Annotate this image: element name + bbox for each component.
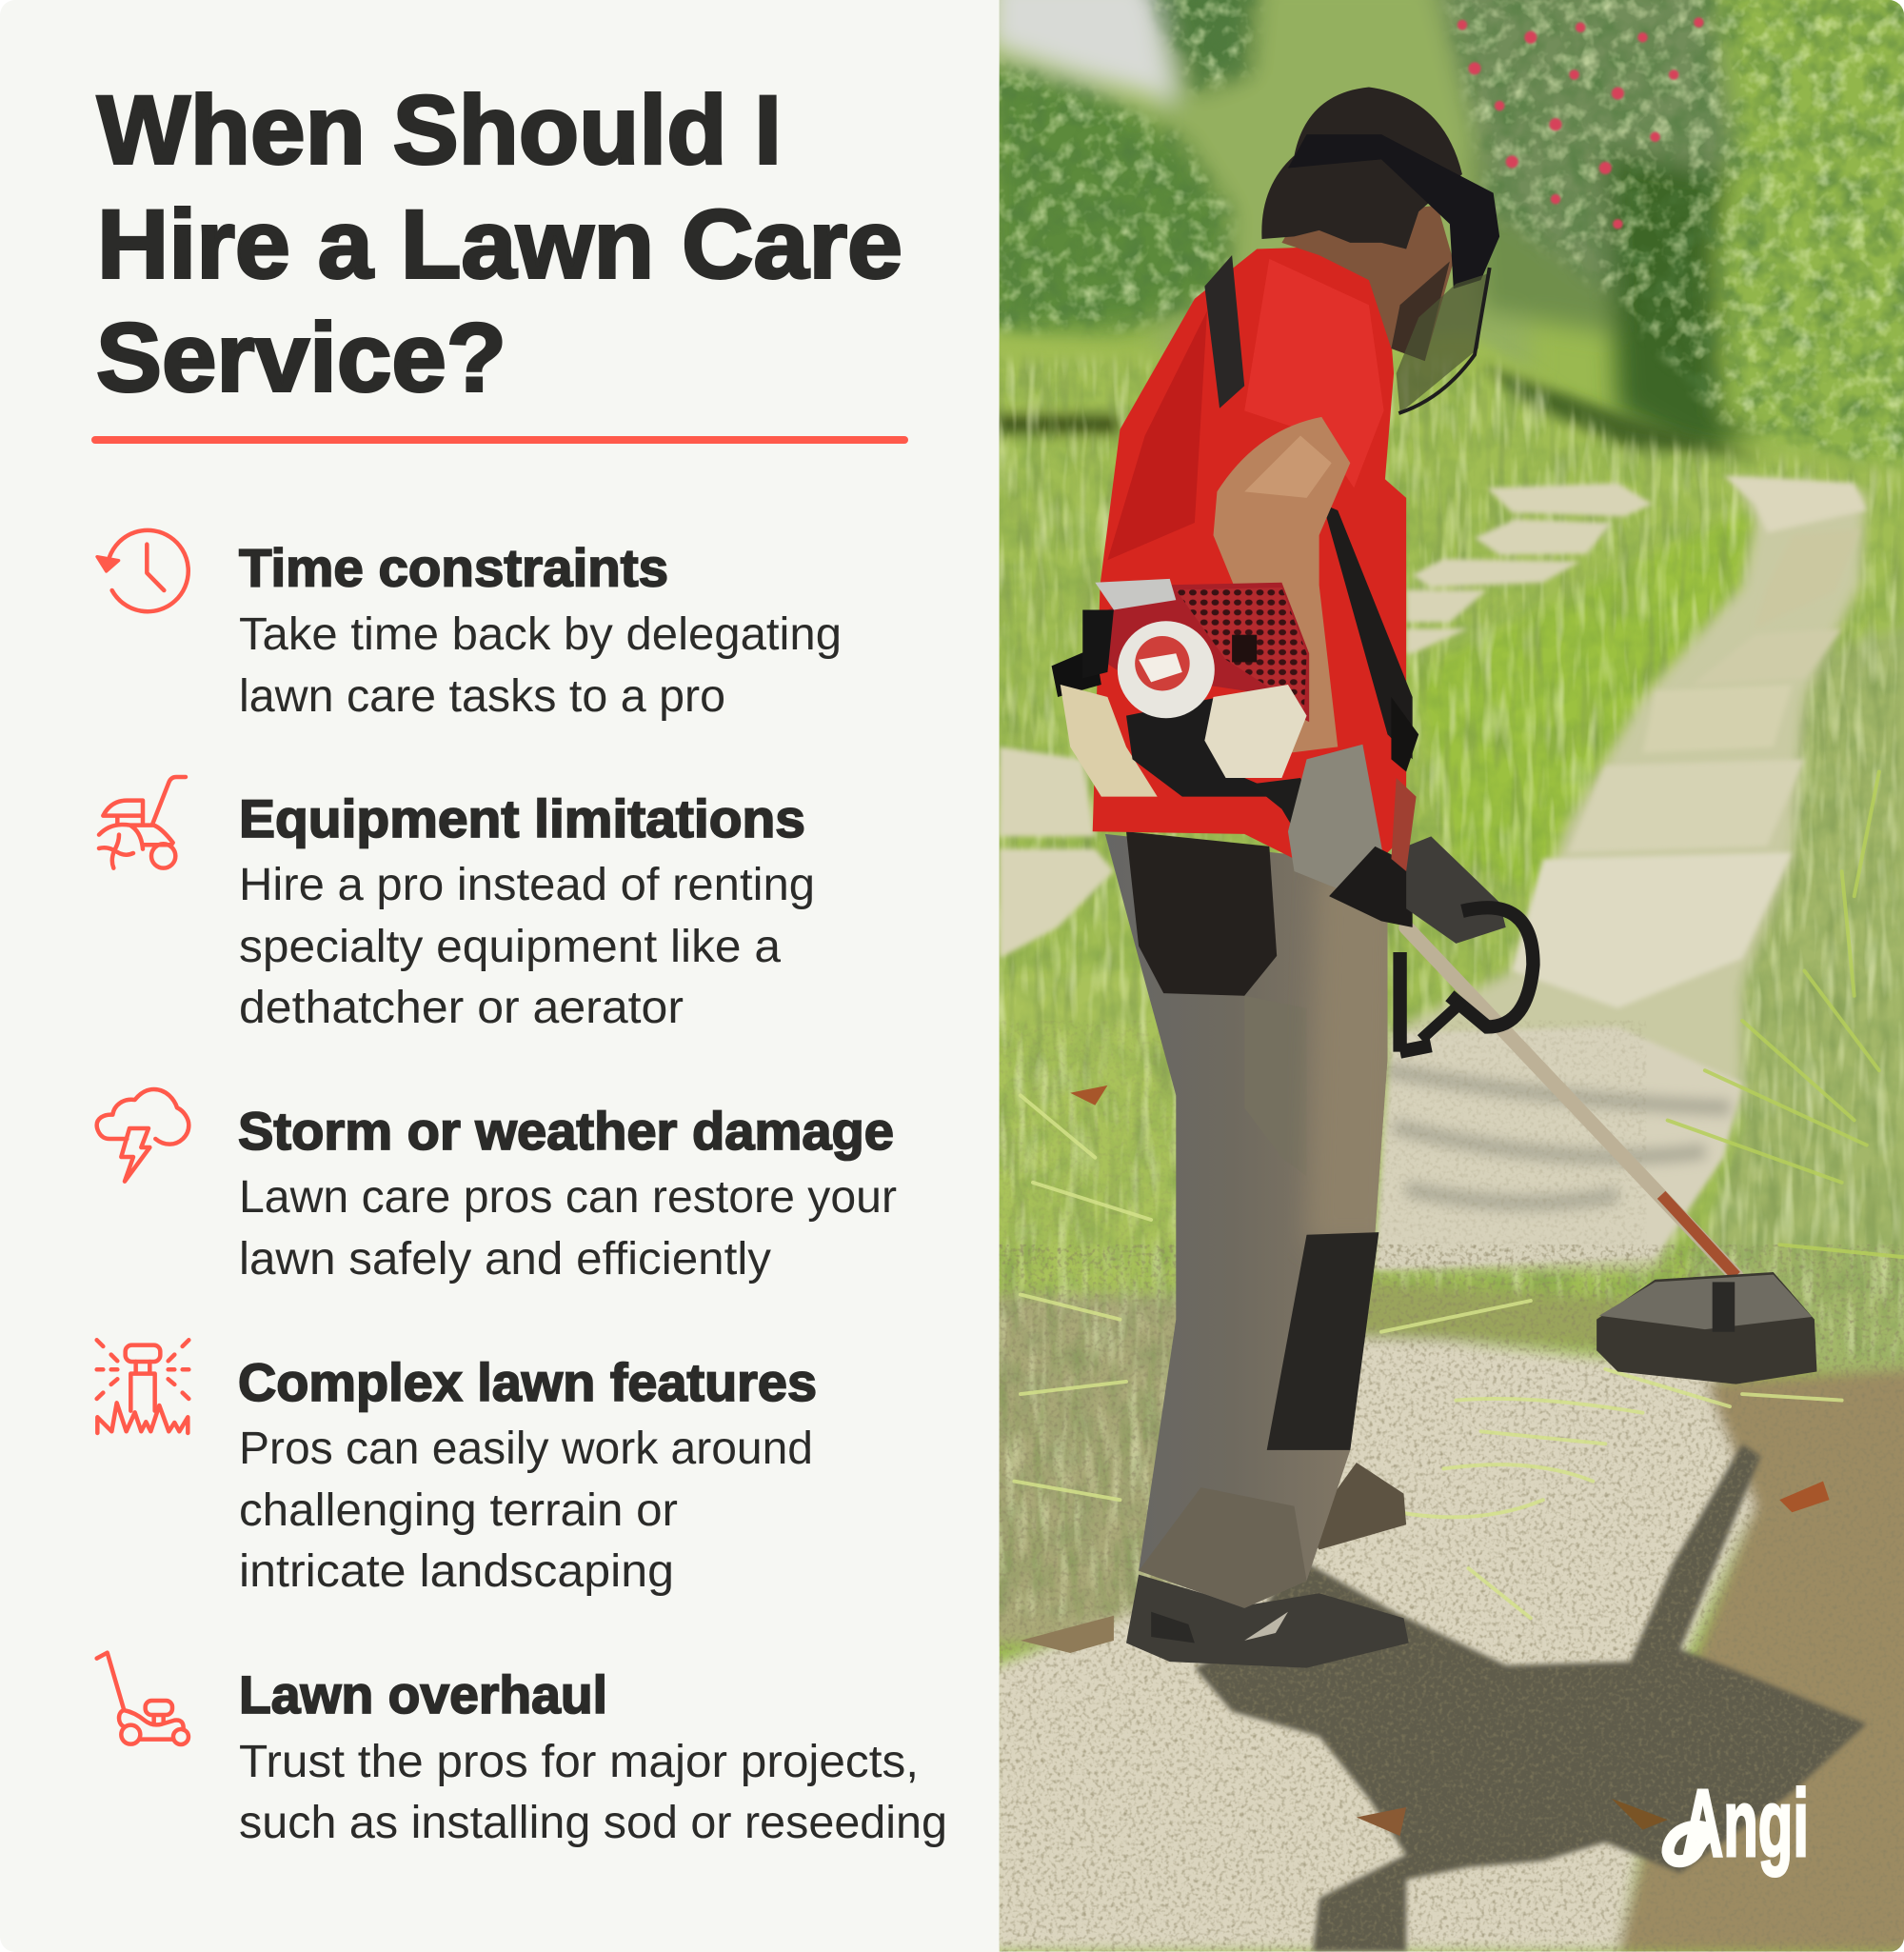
front shoe	[1126, 1575, 1409, 1668]
heading: equipment limitations: Equipment limitations	[239, 788, 805, 848]
photo: lawn care worker trimming grass beside a stone path	[989, 0, 1904, 1952]
item: lawn overhaul	[97, 1653, 947, 1848]
title underline	[91, 436, 908, 444]
neck and face	[1281, 206, 1454, 361]
title: Service?	[96, 303, 506, 411]
description: complex lawn features: Pros can easily work around	[239, 1424, 813, 1474]
description: time constraints: Take time back by delegating	[239, 609, 842, 660]
stone path upper	[1375, 479, 1867, 1269]
icon: sprinkler	[97, 1340, 188, 1433]
trousers	[1105, 834, 1388, 1608]
item: time constraints	[97, 530, 842, 722]
cast shadow	[1195, 1444, 1867, 1952]
arm	[1214, 417, 1350, 753]
description: lawn overhaul	[239, 1737, 947, 1848]
black hip patch	[1126, 831, 1277, 996]
description: lawn overhaul: Trust the pros for major projects,	[239, 1737, 919, 1787]
title: When Should I	[97, 76, 782, 185]
red shirt	[1093, 247, 1406, 865]
description: equipment limitations	[240, 866, 812, 1023]
description: lawn overhaul: such as installing sod or reseeding	[239, 1798, 947, 1848]
foliage texture	[1000, 0, 1904, 498]
heading: storm or weather damage: Storm or weather damage	[238, 1101, 894, 1161]
trousers pocket and folds	[1139, 871, 1400, 1608]
heading: time constraints: Time constraints	[239, 537, 668, 598]
description: complex lawn features: intricate landscaping	[239, 1546, 674, 1597]
icon: tiller	[99, 777, 186, 868]
description: equipment limitations: specialty equipment like a	[239, 922, 781, 972]
description: complex lawn features: challenging terrain or	[239, 1485, 678, 1536]
trimmer handle	[1450, 907, 1533, 1026]
hair	[1261, 88, 1462, 249]
head band	[1288, 134, 1499, 289]
trimmer shaft	[1406, 927, 1736, 1276]
sandy ground	[989, 1282, 1904, 1952]
trimmer engine	[1052, 579, 1319, 840]
description: equipment limitations: dethatcher or aerator	[239, 983, 684, 1033]
worker	[1052, 88, 1816, 1668]
icon: lawn mower	[97, 1653, 188, 1744]
lawn area	[989, 333, 1904, 1643]
description: time constraints: lawn care tasks to a pro	[239, 671, 725, 722]
item: complex lawn features	[97, 1340, 817, 1597]
description: storm or weather damage	[239, 1172, 897, 1285]
icon: clock with counterclockwise arrow	[97, 530, 188, 611]
heading: lawn overhaul: Lawn overhaul	[239, 1664, 607, 1724]
trimmer guard head	[1597, 1272, 1816, 1384]
description: complex lawn features	[239, 1424, 813, 1597]
logo: Angi	[1668, 1770, 1809, 1877]
back shoe	[1307, 1463, 1406, 1549]
work gloves	[1288, 745, 1384, 894]
item: storm or weather damage	[97, 1089, 897, 1285]
grass blades	[1014, 771, 1904, 1618]
description: time constraints	[239, 609, 842, 722]
icon: storm cloud with lightning	[97, 1089, 188, 1182]
title: Hire a Lawn Care	[97, 190, 902, 299]
photo background: grass, foliage and path	[989, 0, 1904, 1952]
description: equipment limitations: Hire a pro instead of renting	[239, 860, 815, 910]
heading: complex lawn features: Complex lawn features	[238, 1352, 817, 1412]
face shield	[1397, 274, 1487, 413]
black knee patch	[1267, 1232, 1378, 1450]
panel: text background	[0, 0, 1000, 1952]
description: storm or weather damage: lawn safely and efficiently	[239, 1234, 771, 1285]
logo: Angi: Angi	[1682, 1770, 1809, 1877]
title	[95, 91, 901, 393]
item: equipment limitations	[99, 777, 815, 1033]
description: storm or weather damage: Lawn care pros can restore your	[239, 1172, 897, 1223]
shoulder strap	[1204, 255, 1244, 408]
